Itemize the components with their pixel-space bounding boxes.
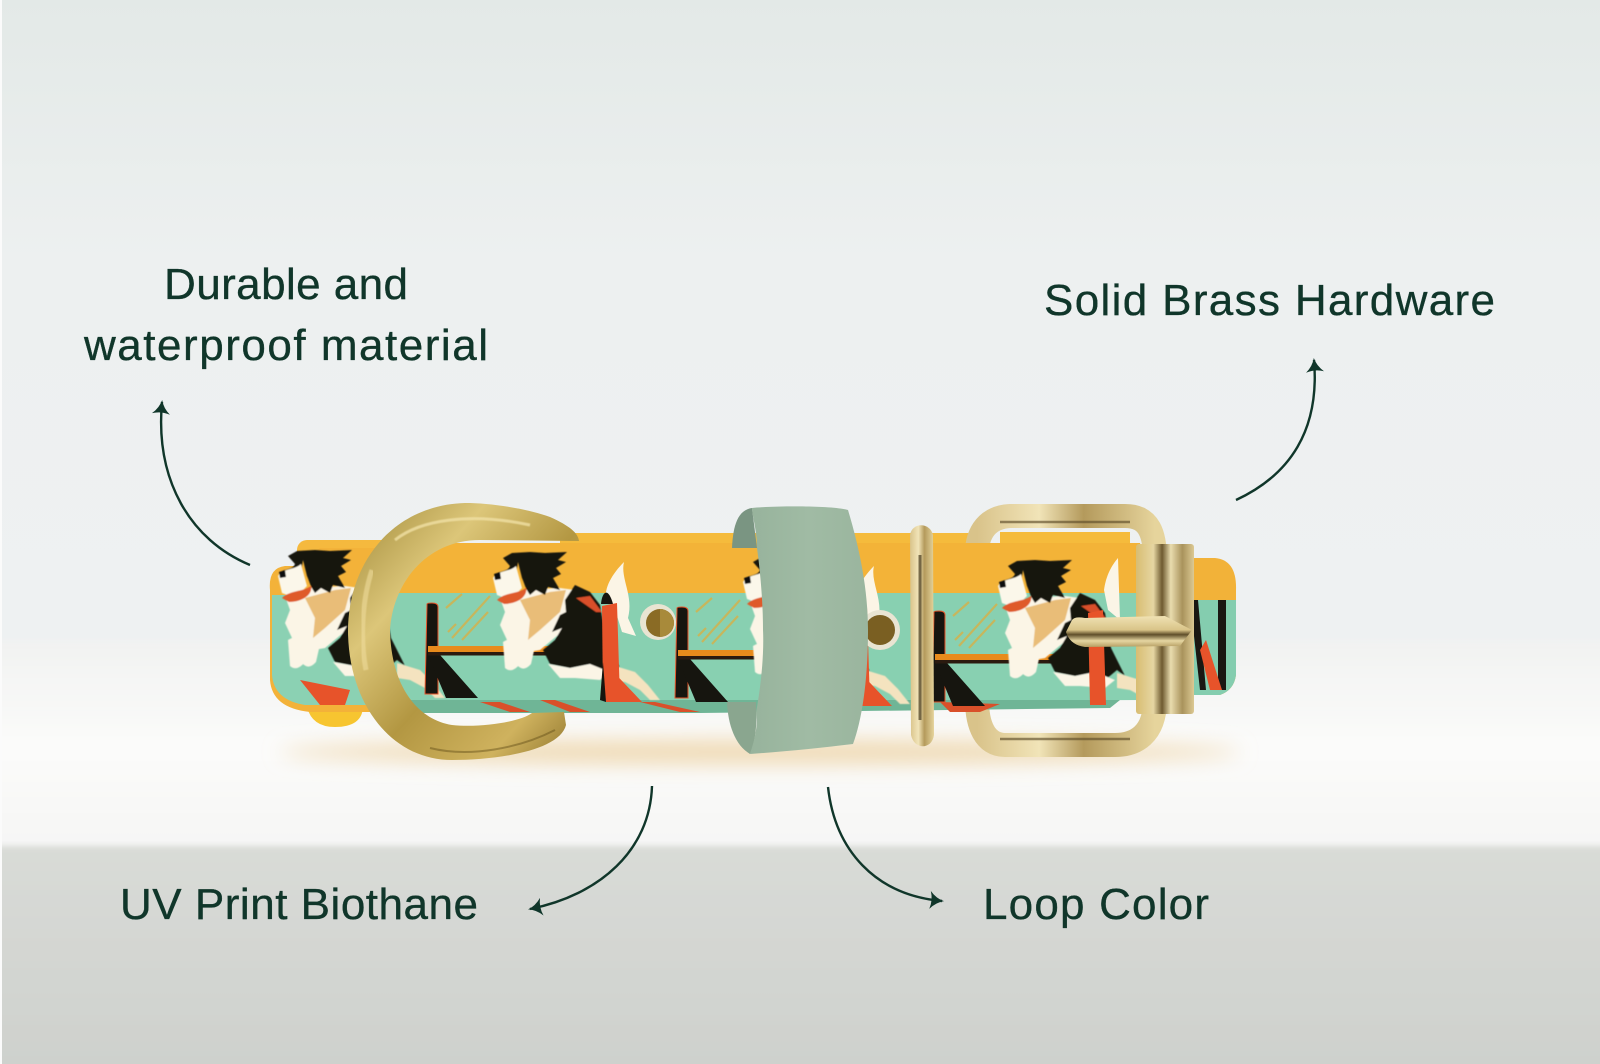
loop front bbox=[750, 506, 868, 754]
label: loop color: Loop Color bbox=[983, 880, 1209, 929]
keeper ring bbox=[910, 525, 934, 746]
arrow: to durable material bbox=[161, 402, 250, 565]
strap mint band bbox=[385, 593, 1145, 702]
dog print: centre dog bbox=[493, 552, 660, 700]
sage loop bbox=[727, 506, 868, 754]
arrow: to loop color bbox=[828, 787, 942, 901]
collar shadow bbox=[280, 740, 1240, 764]
orange post 1 bbox=[600, 603, 642, 702]
label: UV print biothane: UV Print Biothane bbox=[120, 880, 478, 929]
dog print: left of D-ring bbox=[278, 550, 445, 698]
loop inner bottom bbox=[727, 702, 756, 754]
D-ring bbox=[348, 503, 579, 760]
main strap with print bbox=[270, 543, 1165, 713]
buckle tongue bbox=[1066, 616, 1192, 647]
strap yellow band bbox=[385, 543, 1145, 593]
back strap bbox=[297, 532, 1236, 727]
eyelet hole 2 bbox=[860, 610, 900, 650]
label: solid brass hardware: Solid Brass Hardware bbox=[1044, 276, 1495, 325]
buckle frame bbox=[977, 516, 1155, 745]
eyelet hole 1 bbox=[640, 604, 676, 640]
buckle barrel bbox=[1136, 544, 1194, 714]
collar photo bbox=[270, 503, 1236, 760]
loop inner top bbox=[732, 508, 757, 548]
label: durable and waterproof material: Durable and bbox=[164, 260, 408, 309]
far left strap wrap bbox=[270, 548, 400, 712]
label: durable and waterproof material bbox=[83, 260, 488, 370]
arrow: to solid brass hardware bbox=[1236, 360, 1315, 500]
dog print: hidden dog behind loop bbox=[675, 556, 910, 706]
dog print: jump 1 bbox=[425, 562, 636, 698]
dog print: right dog bbox=[932, 558, 1165, 708]
arrow: to UV print biothane bbox=[530, 786, 652, 909]
strap lower edge bbox=[385, 700, 1120, 713]
label: durable and waterproof material: waterproof material bbox=[83, 321, 488, 370]
